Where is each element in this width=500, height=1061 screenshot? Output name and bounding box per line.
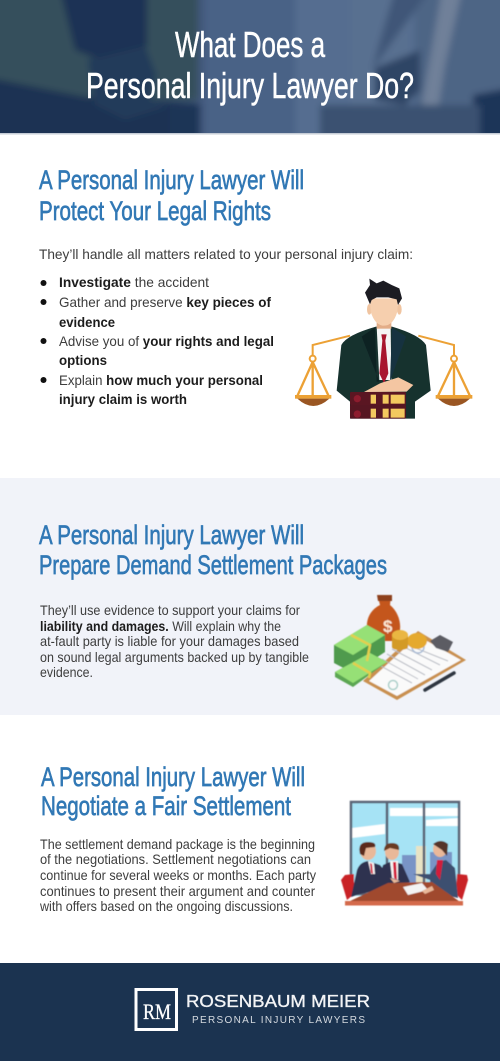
body text: demand settlement: evidence.	[40, 664, 93, 680]
body text: negotiate: continue for several weeks or months. Each party	[40, 867, 316, 883]
body text: negotiate: continues to present their argument and counter	[40, 883, 315, 899]
bullet list	[40, 274, 274, 407]
company name: ROSENBAUM MEIER	[186, 991, 370, 1011]
heading: negotiate: A Personal Injury Lawyer Will	[41, 762, 305, 792]
body text: negotiate: of the negotiations. Settlement negotiations can	[40, 851, 311, 867]
body text: demand settlement: at-fault party is liable for your damages based	[40, 633, 299, 649]
panel: demand settlement packages	[0, 478, 500, 715]
bullet list: evidence	[59, 314, 115, 330]
icon: money and clipboard	[334, 595, 466, 700]
heading: negotiate: Negotiate a Fair Settlement	[41, 791, 291, 821]
intro sentence: They’ll handle all matters related to your personal injury claim:	[39, 246, 413, 262]
title	[86, 24, 414, 106]
body text: demand settlement	[40, 602, 309, 680]
bullet list: Explain how much your personal	[59, 372, 263, 388]
body text: negotiate: The settlement demand package is the beginning	[40, 836, 315, 852]
icon: money and clipboard: $	[383, 617, 393, 636]
bullet list: Advise you of your rights and legal	[59, 333, 274, 349]
body text: negotiate	[39, 836, 316, 914]
panel: negotiate a fair settlement	[0, 715, 500, 963]
panel: protect your legal rights	[0, 135, 500, 478]
header background photo	[0, 0, 500, 144]
body text: demand settlement: on sound legal arguments backed up by tangible	[40, 649, 309, 665]
logo mark	[136, 990, 176, 1030]
heading: protect legal rights: Protect Your Legal Rights	[39, 196, 271, 226]
title: What Does a	[175, 24, 326, 65]
body text: negotiate: with offers based on the ongoing discussions.	[39, 898, 293, 914]
bullet list: options	[59, 352, 107, 368]
body text: demand settlement: liability and damages. Will explain why the	[40, 618, 281, 634]
bullet list: Investigate the accident	[59, 274, 209, 290]
bullet list: Gather and preserve key pieces of	[59, 294, 271, 310]
heading: protect legal rights	[39, 165, 304, 226]
tagline: PERSONAL INJURY LAWYERS	[192, 1015, 365, 1026]
heading: demand settlement: Prepare Demand Settlement Packages	[39, 550, 387, 580]
body text: demand settlement: They’ll use evidence to support your claims for	[40, 602, 300, 618]
heading: demand settlement	[39, 520, 387, 580]
heading: negotiate	[41, 762, 305, 821]
icon: meeting at table	[341, 801, 468, 906]
header banner	[0, 0, 500, 144]
heading: demand settlement: A Personal Injury Lawyer Will	[39, 520, 304, 550]
footer	[0, 963, 500, 1061]
icon: lawyer with scales	[295, 279, 472, 419]
bullet list: injury claim is worth	[59, 391, 187, 407]
heading: protect legal rights: A Personal Injury Lawyer Will	[39, 165, 304, 195]
logo mark: RM	[143, 999, 171, 1024]
